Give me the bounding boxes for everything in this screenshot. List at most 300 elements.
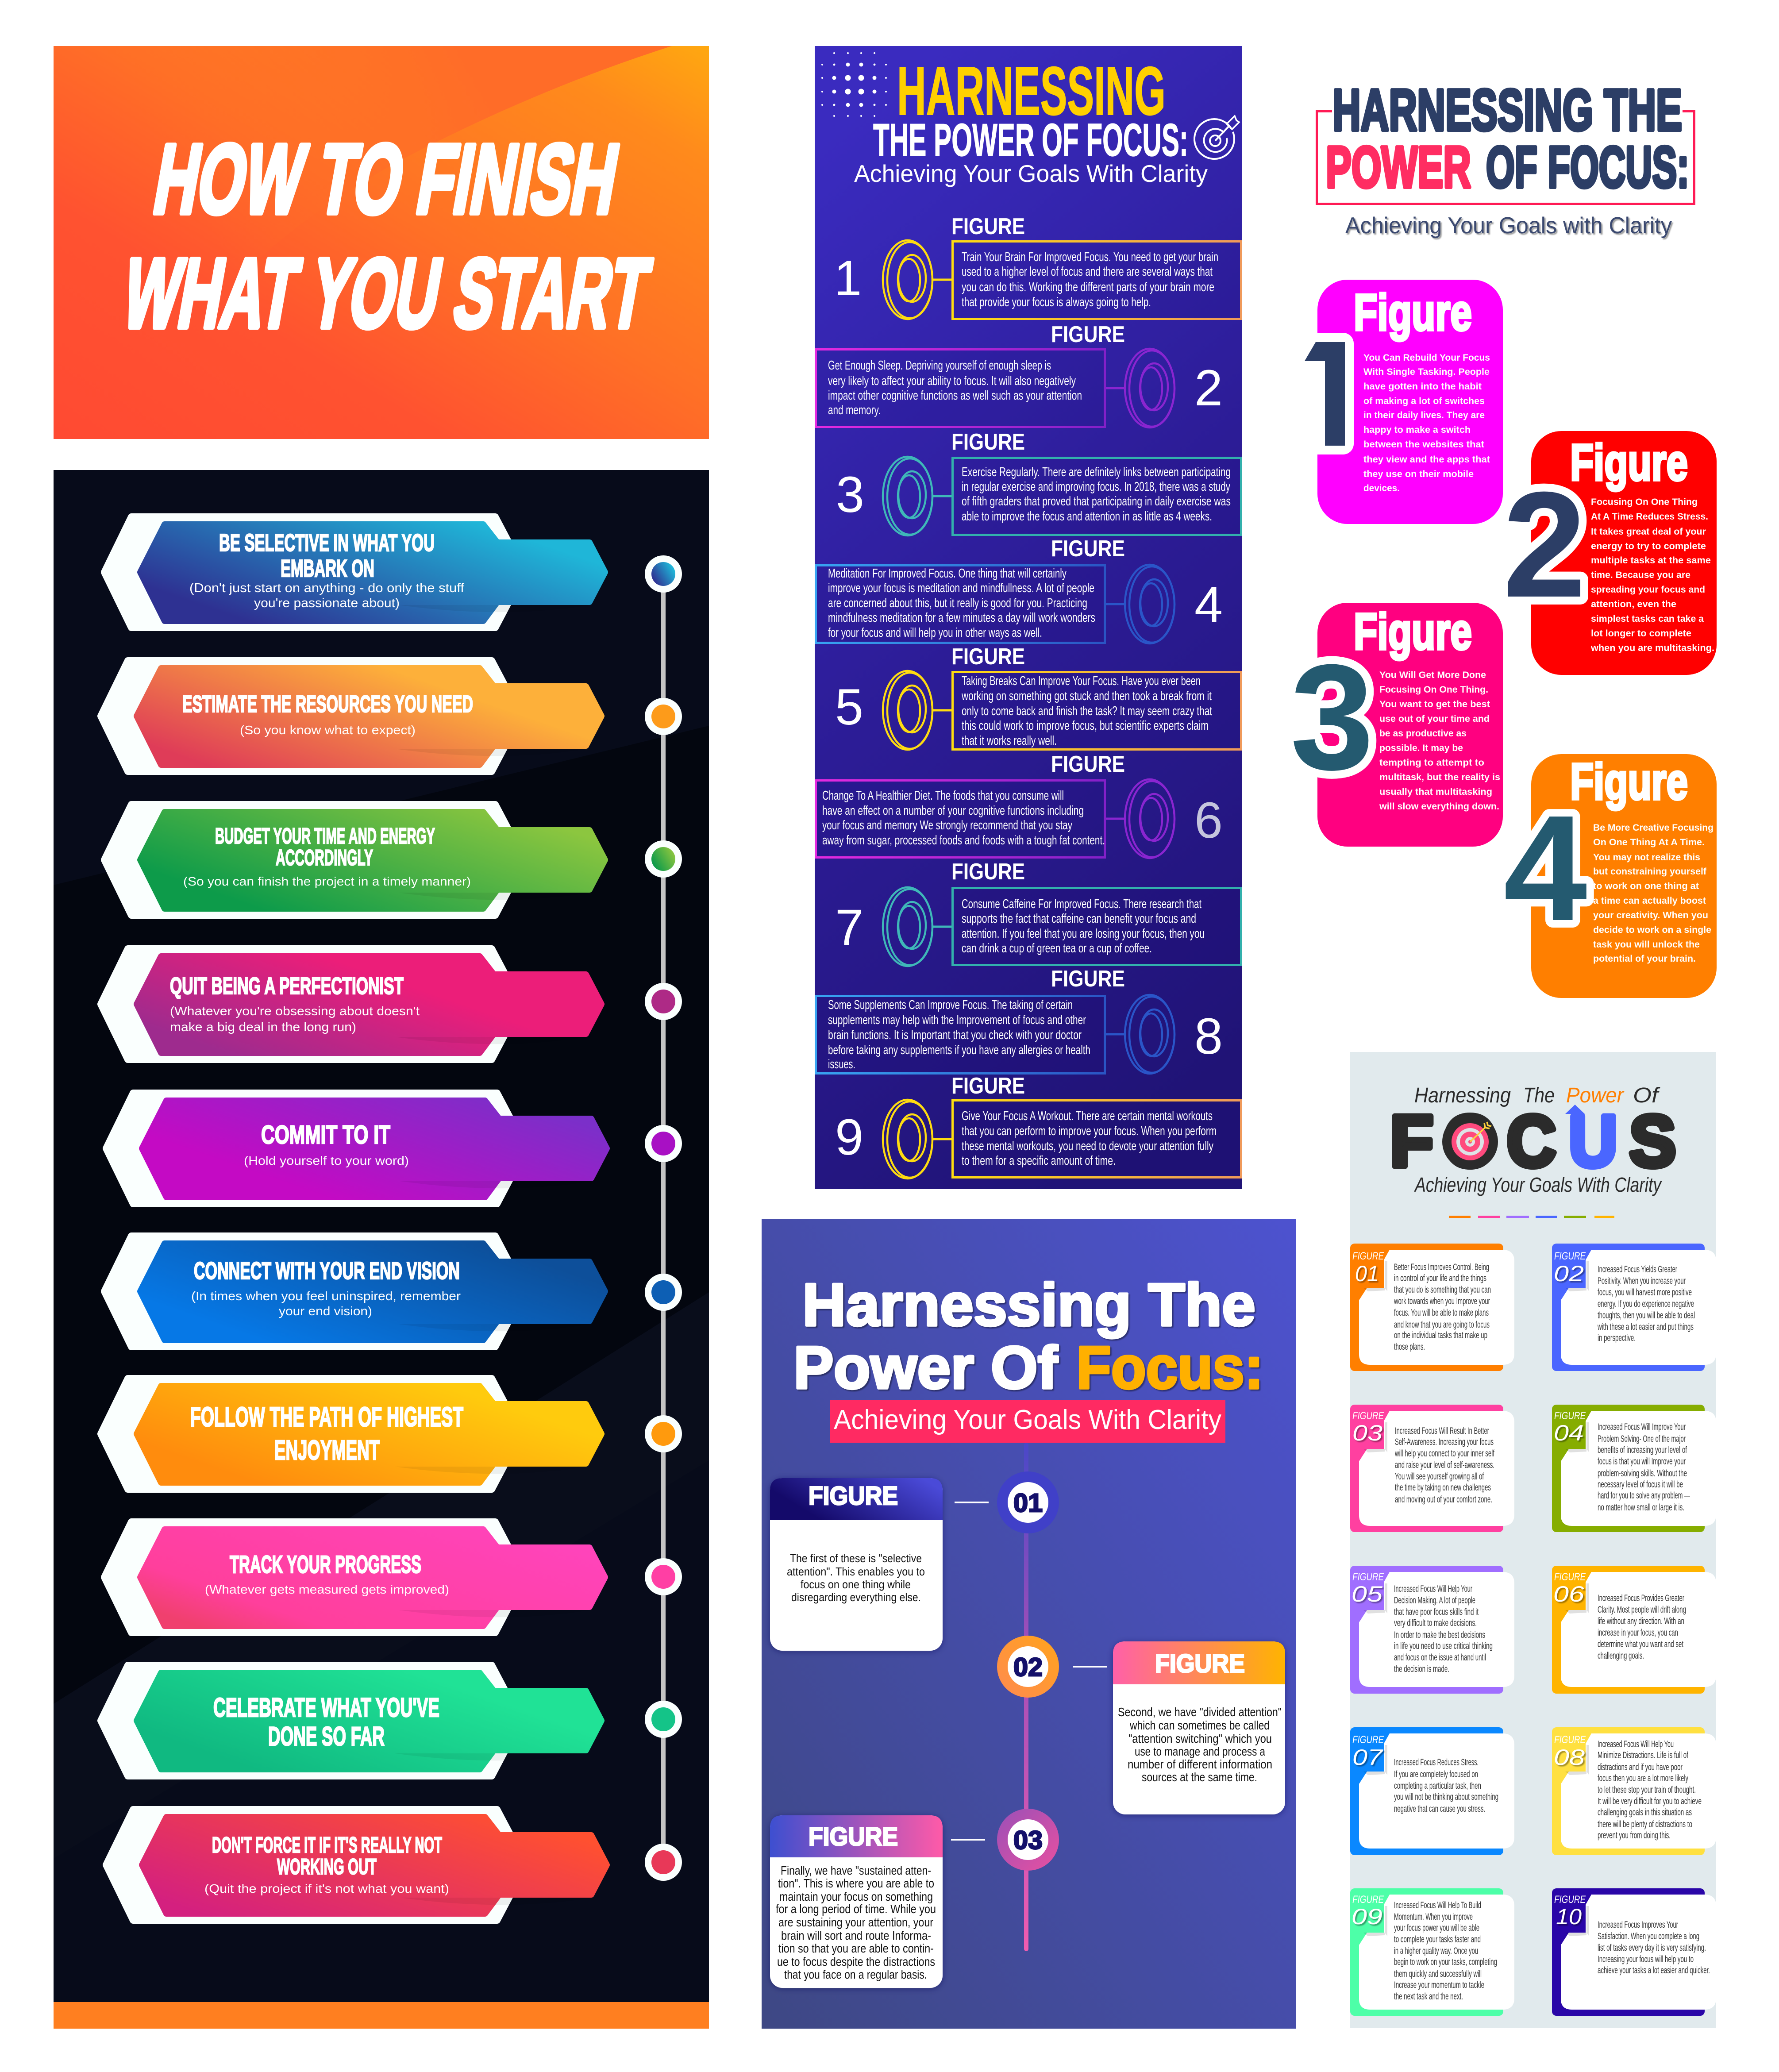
card: figure 03	[770, 1815, 943, 1988]
card: figure 2	[1502, 431, 1717, 675]
card: figure 03: are sustaining your attention, your	[778, 1915, 933, 1929]
card: figure 4: your creativity. When you	[1593, 910, 1708, 920]
card 03: and moving out of your comfort zone.	[1395, 1494, 1492, 1505]
card: figure 03: tion". This is where you are able to	[778, 1876, 934, 1890]
card: figure 02	[1113, 1641, 1285, 1814]
card 07: 07	[1352, 1745, 1384, 1770]
figure 6: have an effect on a number of your cognitive functions including	[822, 804, 1084, 818]
card 08: there will be plenty of distractions to	[1598, 1819, 1692, 1829]
card 02: FIGURE	[1554, 1250, 1586, 1262]
card 05: and focus on the issue at hand until	[1394, 1652, 1486, 1663]
step 1: EMBARK ON	[281, 555, 374, 582]
figure 8: supplements may help with the Improvement of focus and other	[828, 1013, 1086, 1027]
card 05	[1350, 1566, 1514, 1694]
card: figure 4: Be More Creative Focusing	[1593, 823, 1714, 833]
figure 7: 7	[835, 899, 863, 956]
card 01	[1350, 1244, 1514, 1371]
card 03: FIGURE	[1352, 1410, 1384, 1422]
heading: harnessing the power of focus: Power Of	[793, 1334, 1058, 1401]
figure 1: you can do this. Working the different parts of your brain more	[962, 280, 1214, 294]
card 05: in life you need to use critical thinking	[1394, 1641, 1493, 1651]
step 9: DONE SO FAR	[268, 1722, 385, 1751]
figure 3: able to improve the focus and attention in as little as 4 weeks.	[962, 509, 1212, 524]
card 03: Self-Awareness. Increasing your focus	[1395, 1437, 1494, 1447]
card: figure 01: disregarding everything else.	[791, 1591, 921, 1604]
card: figure 4: decide to work on a single	[1593, 925, 1711, 935]
card 01: those plans.	[1394, 1342, 1425, 1352]
card 05: 05	[1352, 1582, 1382, 1606]
card 07: FIGURE	[1352, 1734, 1384, 1746]
card: figure 03: maintain your focus on something	[779, 1890, 933, 1903]
card 08	[1552, 1727, 1716, 1855]
step 10: (Quit the project if it's not what you want)	[204, 1882, 449, 1895]
card 04	[1552, 1405, 1716, 1532]
number 1 with white outline	[1305, 333, 1354, 454]
card: figure 3: possible. It may be	[1379, 743, 1463, 753]
figure 8	[816, 966, 1223, 1074]
heading: focus wordmark: F	[1390, 1101, 1433, 1182]
card: figure 02: FIGURE	[1155, 1649, 1245, 1678]
card 02	[1552, 1244, 1716, 1371]
figure 4	[816, 536, 1223, 643]
node 01: 01	[1013, 1489, 1043, 1517]
card 04: hard for you to solve any problem —	[1598, 1490, 1690, 1501]
card 08: distractions and if you have poor	[1598, 1762, 1683, 1772]
figure 4: for your focus and will help you in other ways as well.	[828, 626, 1042, 640]
figure 9: that you can perform to improve your focus. When you perform	[962, 1124, 1217, 1138]
step 4: QUIT BEING A PERFECTIONIST	[170, 973, 404, 999]
heading: harnessing the power of: Harnessing	[1414, 1084, 1511, 1107]
figure 8: issues.	[828, 1057, 855, 1071]
card 10: Increasing your focus will help you to	[1598, 1954, 1694, 1964]
step 4: (Whatever you're obsessing about doesn't	[170, 1004, 420, 1018]
card: figure 2: At A Time Reduces Stress.	[1591, 512, 1708, 522]
card: figure 2: energy to try to complete	[1591, 541, 1706, 551]
figure 2: Get Enough Sleep. Depriving yourself of enough sleep is	[828, 358, 1051, 373]
card: figure 1: You Can Rebuild Your Focus	[1363, 353, 1490, 363]
figure 1	[834, 214, 1241, 319]
step 10: WORKING OUT	[277, 1854, 377, 1879]
heading: focus wordmark: U	[1569, 1101, 1617, 1182]
figure 6	[816, 751, 1223, 858]
card 05: the decision is made.	[1394, 1664, 1449, 1674]
step 3	[104, 805, 605, 915]
figure 7: can drink a cup of green tea or a cup of coffee.	[962, 941, 1152, 955]
card: figure 01	[770, 1478, 943, 1651]
card: figure 4: Figure	[1570, 753, 1688, 810]
figure 6: away from sugar, processed foods and foods with a tough fat content.	[822, 833, 1105, 847]
node 01	[955, 1471, 1059, 1533]
step 9: CELEBRATE WHAT YOU'VE	[213, 1693, 439, 1722]
figure 4: improve your focus is meditation and mindfullness. A lot of people	[828, 581, 1094, 595]
card: figure 3: will slow everything down.	[1379, 801, 1499, 812]
card 07: you will not be thinking about something	[1394, 1792, 1498, 1802]
card 06: Clarity. Most people will drift along	[1598, 1605, 1686, 1615]
card 03: the time by taking on new challenges	[1395, 1483, 1491, 1493]
card: figure 4	[1503, 753, 1717, 998]
card: figure 2: It takes great deal of your	[1591, 527, 1706, 537]
figure 6: FIGURE	[1051, 751, 1125, 777]
heading: harnessing the power of: Power	[1566, 1084, 1625, 1107]
heading: harnessing the power of	[1414, 1084, 1660, 1107]
heading: harnessing the power of focus: Focus:	[1076, 1334, 1263, 1401]
timeline dots	[645, 555, 682, 1881]
card 03: 03	[1352, 1421, 1382, 1445]
step 2: ESTIMATE THE RESOURCES YOU NEED	[182, 691, 473, 717]
step 4: make a big deal in the long run)	[170, 1020, 356, 1034]
step 1	[104, 517, 605, 628]
card 05: Decision Making. A lot of people	[1394, 1595, 1475, 1606]
card 03: You will see yourself growing all of	[1395, 1471, 1484, 1482]
card: figure 03: ue to focus despite the distractions	[777, 1955, 935, 1968]
figure 4: mindfulness meditation for a few minutes a day will work wonders	[828, 611, 1095, 625]
card 05: very difficult to make decisions.	[1394, 1618, 1477, 1628]
figure 1: Train Your Brain For Improved Focus. You need to get your brain	[962, 250, 1218, 264]
card: figure 1: devices.	[1363, 483, 1400, 493]
figure 1: that provide your focus is always going to help.	[962, 295, 1151, 309]
figure 3: of fifth graders that proved that participating in daily exercise was	[962, 494, 1231, 508]
step 8	[104, 1522, 605, 1633]
card 09: the next task and the next.	[1394, 1991, 1463, 2002]
card 05: Increased Focus Will Help Your	[1394, 1584, 1472, 1594]
card: figure 2: lot longer to complete	[1591, 628, 1691, 639]
heading: harnessing the power of focus: POWER	[1326, 135, 1471, 200]
card 06: determine what you want and set	[1598, 1639, 1683, 1649]
card: figure 02: Second, we have "divided attention"	[1118, 1705, 1282, 1719]
card 05: that have poor focus skills find it	[1394, 1607, 1479, 1617]
card 08: challenging goals in this situation as	[1598, 1807, 1692, 1818]
card 02: Increased Focus Yields Greater	[1598, 1264, 1677, 1275]
step 1: you're passionate about)	[254, 596, 400, 610]
panel: harnessing white title and cards	[1288, 77, 1717, 998]
figure 6: your focus and memory We strongly recommend that you stay	[822, 818, 1072, 832]
card: figure 3: Figure	[1354, 603, 1472, 660]
heading: harnessing: HARNESSING	[897, 53, 1166, 129]
figure 1: 1	[834, 250, 862, 306]
card 08: 08	[1554, 1745, 1585, 1770]
figure 2: and memory.	[828, 403, 881, 417]
node 02: 02	[1013, 1653, 1043, 1682]
card 09: your focus power you will be able	[1394, 1923, 1479, 1933]
card 05: In order to make the best decisions	[1394, 1630, 1485, 1640]
card 07: negative that can cause you stress.	[1394, 1804, 1485, 1814]
card: figure 2: when you are multitasking.	[1590, 643, 1714, 653]
step 6: your end vision)	[279, 1304, 372, 1318]
panel: harnessing blue timeline	[762, 1219, 1296, 2029]
icon: target with arrow	[1194, 116, 1239, 159]
figure 9: Give Your Focus A Workout. There are certain mental workouts	[962, 1109, 1213, 1123]
card: figure 4: 4	[1503, 784, 1588, 952]
card: figure 2: Figure	[1570, 434, 1688, 491]
card 07	[1350, 1727, 1514, 1855]
card 01: Better Focus Improves Control. Being	[1394, 1262, 1489, 1272]
card 06: FIGURE	[1554, 1571, 1586, 1583]
subtitle banner	[830, 1400, 1225, 1443]
icon: target	[1442, 1114, 1498, 1170]
card 10: Satisfaction. When you complete a long	[1598, 1931, 1699, 1941]
figure 8: before taking any supplements if you have any allergies or health	[828, 1043, 1090, 1057]
heading: harnessing the power of focus	[1326, 77, 1689, 200]
step 3: (So you can finish the project in a timely manner)	[183, 874, 471, 888]
figure 9: 9	[835, 1109, 863, 1166]
step 7: FOLLOW THE PATH OF HIGHEST	[190, 1402, 463, 1433]
card 10: FIGURE	[1554, 1894, 1586, 1906]
step 10	[106, 1810, 607, 1920]
step 6	[104, 1236, 605, 1347]
card 04: FIGURE	[1554, 1410, 1586, 1422]
card 04: 04	[1554, 1421, 1584, 1445]
card 09: Momentum. When you improve	[1394, 1912, 1473, 1922]
card 08: focus then you are a lot more likely	[1598, 1773, 1688, 1783]
card: figure 1: of making a lot of switches	[1363, 396, 1485, 406]
halftone dots	[821, 52, 887, 117]
card: figure 03: for a long period of time. While you	[776, 1902, 936, 1916]
figure 7	[835, 859, 1241, 966]
card 02: focus, you will harvest more positive	[1598, 1287, 1692, 1298]
card: figure 01: FIGURE	[809, 1482, 898, 1510]
card: figure 4: task you will unlock the	[1593, 940, 1700, 950]
card 07: completing a particular task, then	[1394, 1781, 1481, 1791]
figure 4: 4	[1194, 577, 1223, 633]
card 03: and raise your level of self-awareness.	[1395, 1460, 1494, 1470]
heading: focus wordmark: S	[1629, 1101, 1676, 1182]
card 06: life without any direction. With an	[1598, 1616, 1684, 1626]
card 09: begin to work on your tasks, completing	[1394, 1957, 1497, 1967]
subtitle banner: Achieving Your Goals With Clarity	[834, 1405, 1221, 1435]
card 03: will help you connect to your inner self	[1394, 1448, 1494, 1459]
step 2: (So you know what to expect)	[240, 723, 416, 737]
card: figure 3: be as productive as	[1379, 728, 1467, 739]
card 05: FIGURE	[1352, 1571, 1384, 1583]
step 10: DON'T FORCE IT IF IT'S REALLY NOT	[212, 1833, 442, 1857]
title frame	[1317, 112, 1694, 204]
card: figure 1: happy to make a switch	[1363, 425, 1471, 435]
card 03: Increased Focus Will Result In Better	[1395, 1426, 1489, 1436]
step 2	[101, 661, 601, 771]
figure 7: Consume Caffeine For Improved Focus. There research that	[962, 897, 1201, 911]
figure 3: Exercise Regularly. There are definitely links between participating	[962, 465, 1231, 479]
panel: dark steps list	[54, 470, 709, 2029]
card: figure 2: simplest tasks can take a	[1591, 614, 1704, 624]
card: figure 03: that you face on a regular basis.	[784, 1968, 927, 1981]
card 02: with these a lot easier and put things	[1597, 1322, 1694, 1332]
figure 4: FIGURE	[1051, 536, 1125, 562]
card 09: Increase your momentum to tackle	[1394, 1980, 1484, 1990]
card 09: 09	[1352, 1904, 1382, 1929]
card: figure 03: Finally, we have "sustained atten-	[781, 1864, 931, 1877]
card 08: prevent you from doing this.	[1598, 1830, 1671, 1841]
step 8: (Whatever gets measured gets improved)	[205, 1583, 449, 1596]
card 02: 02	[1554, 1261, 1584, 1286]
card 10	[1552, 1888, 1716, 2016]
card 02: in perspective.	[1598, 1333, 1636, 1343]
heading: harnessing the power of focus: Harnessing The	[802, 1271, 1255, 1338]
card: figure 1: With Single Tasking. People	[1363, 367, 1490, 377]
figure 4: Meditation For Improved Focus. One thing that will certainly	[828, 566, 1067, 581]
card: figure 1: they use on their mobile	[1363, 469, 1474, 479]
step 5	[106, 1093, 607, 1204]
icon: up arrow on U	[1565, 1105, 1585, 1122]
figure 5: 5	[835, 679, 863, 736]
card 06: challenging goals.	[1598, 1651, 1644, 1661]
card: figure 01: attention". This enables you to	[787, 1565, 925, 1578]
title: how to finish what you start: WHAT YOU START	[116, 239, 657, 348]
card 07: If you are completely focused on	[1394, 1769, 1478, 1779]
card: figure 3: 3	[1290, 633, 1374, 801]
card 09: them quickly and successfully will	[1394, 1969, 1482, 1979]
card: figure 1: they view and the apps that	[1363, 454, 1490, 465]
card 04: no matter how small or large it is.	[1598, 1502, 1684, 1513]
card: figure 3: You Will Get More Done	[1379, 670, 1486, 680]
step 6: (In times when you feel uninspired, remember	[191, 1289, 461, 1303]
card: figure 3: use out of your time and	[1379, 714, 1490, 724]
panel: harnessing focus grey	[1350, 1052, 1716, 2028]
step 7	[101, 1379, 601, 1489]
card: figure 1: Figure	[1354, 284, 1472, 341]
card: figure 3	[1290, 603, 1503, 847]
card 02: energy. If you do experience negative	[1598, 1299, 1694, 1309]
card 06: increase in your focus, you can	[1598, 1628, 1678, 1638]
card 01: 01	[1355, 1261, 1379, 1286]
card: figure 1: have gotten into the habit	[1363, 381, 1482, 392]
figure 6: Change To A Healthier Diet. The foods that you consume will	[822, 789, 1064, 803]
card 08: to let these stop your train of thought.	[1598, 1785, 1696, 1795]
figure 6: 6	[1194, 792, 1223, 849]
card 03	[1350, 1405, 1514, 1532]
card 09: in a higher quality way. Once you	[1394, 1946, 1478, 1956]
card 04: Increased Focus Will Improve Your	[1598, 1422, 1686, 1432]
figure 5: that it works really well.	[962, 734, 1057, 748]
node 02	[997, 1636, 1107, 1698]
heading: focus wordmark	[1390, 1101, 1676, 1182]
card 01: on the individual tasks that make up	[1394, 1330, 1487, 1340]
figure 2: impact other cognitive functions as well such as your attention	[828, 389, 1082, 403]
figure 9	[835, 1073, 1241, 1178]
card 02: thoughts, then you will be able to deal	[1598, 1310, 1695, 1321]
card 02: Positivity. When you increase your	[1598, 1276, 1686, 1286]
card: figure 1: between the websites that	[1363, 439, 1484, 450]
card: figure 02: sources at the same time.	[1142, 1770, 1257, 1784]
figure 4: are concerned about this, but it really is good for you. Practicing	[828, 596, 1087, 610]
card 01: and know that you are going to focus	[1394, 1320, 1490, 1330]
figure 7: attention. If you feel that you are losing your focus, then you	[962, 927, 1205, 941]
card 10: Increased Focus Improves Your	[1598, 1920, 1678, 1930]
step 5: (Hold yourself to your word)	[244, 1154, 409, 1167]
timeline line	[1024, 1443, 1028, 1951]
card: figure 4: but constraining yourself	[1593, 867, 1707, 877]
card: figure 1: in their daily lives. They are	[1363, 410, 1485, 420]
card 09: FIGURE	[1352, 1894, 1384, 1906]
figure 8: brain functions. It is Important that you check with your doctor	[828, 1028, 1082, 1042]
heading: focus wordmark: C	[1507, 1101, 1556, 1182]
title: how to finish what you start	[116, 124, 657, 348]
figure 5	[835, 644, 1241, 750]
figure 9: these mental workouts, you need to devote your attention fully	[962, 1139, 1213, 1153]
card 10: achieve your tasks a lot easier and quicker.	[1598, 1965, 1710, 1976]
card: figure 01: focus on one thing while	[801, 1578, 911, 1591]
card: figure 02: number of different information	[1128, 1757, 1272, 1771]
card 04: problem-solving skills. Without the	[1598, 1468, 1687, 1479]
figure 1: FIGURE	[951, 214, 1025, 239]
card: figure 3: usually that multitasking	[1379, 787, 1492, 797]
title: how to finish what you start: HOW TO FINISH	[147, 124, 626, 234]
card 09: to complete your tasks faster and	[1394, 1934, 1481, 1945]
heading: harnessing the power of focus	[793, 1271, 1263, 1401]
card 09: Increased Focus Will Help To Build	[1394, 1900, 1481, 1910]
timeline line	[661, 574, 666, 1862]
node 03	[951, 1809, 1059, 1871]
card: figure 03: brain will sort and route Informa-	[781, 1929, 931, 1942]
panel: how to finish header	[54, 46, 709, 439]
figure 5: only to come back and finish the task? It may seem crazy that	[962, 704, 1212, 718]
figure 9: to them for a specific amount of time.	[962, 1154, 1116, 1168]
card: figure 2: multiple tasks at the same	[1591, 555, 1711, 566]
orange footer bar	[54, 2002, 709, 2029]
card: figure 3: You want to get the best	[1379, 699, 1490, 709]
step 7: ENJOYMENT	[274, 1435, 380, 1466]
card 10: list of tasks every day it is very satisfying.	[1598, 1943, 1706, 1953]
card: figure 4: to work on one thing at	[1593, 881, 1699, 891]
figure 2: FIGURE	[1051, 322, 1125, 347]
panel: harnessing purple	[815, 46, 1242, 1189]
figure 5: working on something got stuck and then took a break from it	[961, 689, 1212, 703]
subtitle: Achieving Your Goals with Clarity	[1345, 213, 1672, 239]
card: figure 03: FIGURE	[809, 1822, 898, 1851]
card 08: FIGURE	[1554, 1734, 1586, 1746]
card 06	[1552, 1566, 1716, 1694]
figure 7: supports the fact that caffeine can benefit your focus and	[962, 912, 1196, 926]
card: figure 3: tempting to attempt to	[1379, 758, 1484, 768]
card: figure 4: On One Thing At A Time.	[1593, 837, 1705, 847]
figure 1: used to a higher level of focus and there are several ways that	[962, 265, 1213, 279]
card: figure 01: The first of these is "selective	[790, 1552, 922, 1565]
step 6: CONNECT WITH YOUR END VISION	[194, 1257, 460, 1284]
card: figure 4: potential of your brain.	[1593, 954, 1696, 964]
heading: focus wordmark: O	[1444, 1101, 1497, 1182]
card: figure 03: tion so that you are able to contin-	[778, 1941, 934, 1955]
card 06: Increased Focus Provides Greater	[1598, 1593, 1684, 1603]
heading: harnessing the power of: Of	[1633, 1084, 1660, 1107]
card 08: Minimize Distractions. Life is full of	[1598, 1750, 1688, 1760]
card: figure 2: Focusing On One Thing	[1591, 497, 1698, 507]
card: figure 2: attention, even the	[1591, 599, 1676, 609]
figure 5: FIGURE	[951, 644, 1025, 670]
step 5: COMMIT TO IT	[261, 1121, 390, 1149]
card: figure 4: a time can actually boost	[1593, 896, 1706, 906]
step 1: (Don't just start on anything - do only the stuff	[189, 581, 465, 595]
card 07: Increased Focus Reduces Stress.	[1394, 1757, 1479, 1768]
subtitle: Achieving Your Goals With Clarity	[854, 160, 1208, 187]
figure 8: 8	[1194, 1008, 1223, 1065]
node 03: 03	[1013, 1826, 1043, 1855]
card: figure 2: time. Because you are	[1591, 570, 1690, 580]
step 1: BE SELECTIVE IN WHAT YOU	[219, 529, 435, 556]
card 01: FIGURE	[1352, 1250, 1384, 1262]
card: figure 1	[1288, 280, 1503, 524]
card 04: focus is that you will Improve your	[1598, 1456, 1686, 1467]
card: figure 02: which can sometimes be called	[1129, 1718, 1270, 1732]
figure 3: 3	[836, 466, 864, 523]
figure 3	[836, 429, 1241, 535]
card 01: that you do is something that you can	[1394, 1285, 1491, 1295]
card: figure 02: use to manage and process a	[1135, 1745, 1265, 1758]
step 3: ACCORDINGLY	[276, 845, 373, 870]
card: figure 2: 2	[1502, 461, 1586, 629]
card 06: 06	[1553, 1582, 1584, 1606]
figure 2	[816, 322, 1223, 427]
color dashes	[1449, 1216, 1614, 1218]
card: figure 4: You may not realize this	[1593, 852, 1700, 863]
